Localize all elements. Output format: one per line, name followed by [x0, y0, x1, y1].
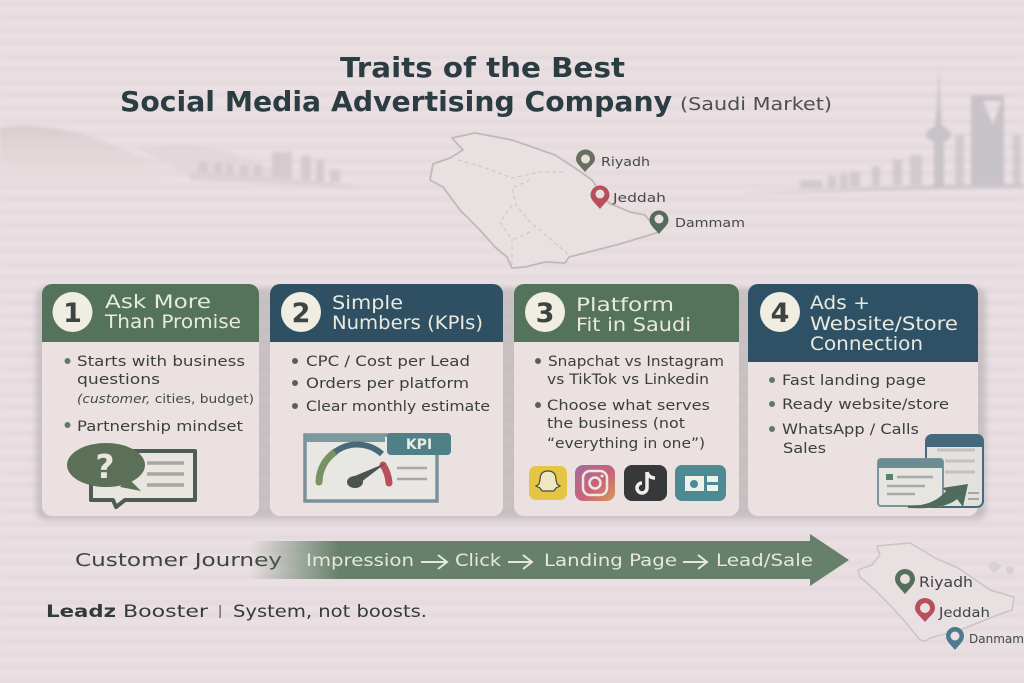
heading 1: [104, 291, 241, 333]
bullet list 3: Snapchat vs Instagram: [548, 354, 724, 370]
footer brand line: Leadz: [46, 602, 116, 622]
icon: KPI gauge dashboard: [305, 433, 451, 501]
bullet list 3: [535, 354, 724, 452]
pin: Danmam small: Danmam: [969, 632, 1024, 646]
customer journey arrow: Lead/Sale: [716, 551, 813, 571]
bullet list 1: questions: [77, 372, 160, 388]
right skyline backdrop: [745, 66, 1024, 194]
badge 1: [52, 292, 92, 332]
bullet list 3: “everything in one”): [547, 436, 705, 452]
heading 3: Platform: [576, 294, 674, 316]
heading 2: Simple: [332, 292, 403, 314]
icon: Snapchat: [529, 466, 567, 500]
heading 4: Website/Store: [810, 313, 958, 335]
subtitle: Saudi Market: (Saudi Market): [680, 94, 832, 115]
card shadows strip: [36, 288, 986, 520]
heading 3: Fit in Saudi: [576, 314, 691, 336]
badge 4: 4: [771, 298, 789, 329]
bullet list 3: the business (not: [547, 416, 685, 432]
customer journey arrow: Landing Page: [544, 551, 677, 571]
pin: Riyadh: Riyadh: [601, 154, 650, 169]
pin: Dammam: [650, 210, 745, 234]
panel 4: Ads + Website/Store Connection: [748, 284, 983, 516]
panel 2: Simple Numbers (KPIs): [270, 284, 503, 516]
icon: question speech bubble: [67, 443, 195, 507]
icon: TikTok: [624, 465, 667, 501]
bullet list 1: (customer, cities, budget): [77, 391, 254, 406]
heading 1: Ask More: [105, 291, 211, 313]
title: Traits of the Best: [340, 51, 625, 84]
icon: question speech bubble: ?: [95, 447, 115, 486]
pin: Jeddah: Jeddah: [612, 190, 666, 205]
bullet list 2: Clear monthly estimate: [306, 399, 490, 415]
pin: Jeddah small: Jeddah: [938, 605, 990, 621]
bullet list 4: [769, 373, 949, 457]
pin: Riyadh small: Riyadh: [919, 575, 973, 591]
pin: Jeddah: [590, 186, 666, 209]
pin: Danmam small: [946, 627, 1024, 650]
customer journey arrow: Impression: [306, 551, 414, 571]
map of Saudi Arabia with cities: [430, 133, 745, 268]
bullet list 4: Sales: [783, 441, 826, 457]
icon: Instagram: [575, 465, 615, 501]
badge 3: [525, 292, 565, 332]
bullet list 3: vs TikTok vs Linkedin: [547, 372, 709, 388]
badge 4: [760, 292, 800, 332]
heading 1: Than Promise: [104, 311, 241, 333]
panel 3: Platform Fit in Saudi: [514, 284, 739, 516]
bullet list 1: [64, 354, 254, 435]
heading 3: [576, 294, 691, 336]
small map with cities: [858, 543, 1024, 650]
customer journey heading: Customer Journey: [75, 550, 282, 571]
icon: camera / LinkedIn tile: [675, 465, 726, 501]
bullet list 2: [292, 354, 490, 415]
badge 2: 2: [292, 298, 310, 329]
footer brand line: Booster: [123, 602, 208, 622]
bullet list 4: Fast landing page: [782, 373, 926, 389]
faint decorative icons: [988, 561, 1014, 574]
heading 2: [332, 292, 483, 334]
heading 4: Connection: [810, 333, 923, 355]
bullet list 4: Ready website/store: [782, 397, 949, 413]
bullet list 3: Choose what serves: [547, 398, 710, 414]
map outline: [430, 133, 659, 268]
footer brand line: System, not boosts.: [233, 602, 427, 622]
title: Social Media Advertising Company: [120, 85, 672, 118]
bullet list 2: Orders per platform: [306, 376, 469, 392]
heading 2: Numbers (KPIs): [332, 312, 483, 334]
customer journey arrow: [250, 534, 849, 586]
pin: Jeddah small: [915, 598, 990, 622]
badge 3: 3: [536, 298, 554, 329]
footer brand line: [46, 602, 427, 622]
customer journey arrow: Click: [455, 551, 501, 571]
bullet list 2: CPC / Cost per Lead: [306, 354, 470, 370]
icon: KPI gauge dashboard: KPI: [406, 437, 432, 453]
title: [120, 51, 672, 118]
panel 1: Ask More Than Promise: [42, 284, 259, 516]
pin: Dammam: Dammam: [675, 215, 745, 230]
bullet list 1: Starts with business: [77, 354, 245, 370]
badge 1: 1: [63, 298, 82, 329]
pin: Riyadh small: [895, 569, 973, 594]
badge 2: [281, 292, 321, 332]
heading 4: Ads +: [810, 292, 870, 314]
icon: phone and browser with growth arrow: [878, 435, 983, 508]
small map outline: [858, 543, 1014, 641]
bullet list 1: Partnership mindset: [77, 419, 243, 435]
heading 4: [810, 292, 958, 355]
bullet list 4: WhatsApp / Calls: [782, 422, 919, 438]
left desert skyline backdrop: [0, 126, 365, 195]
pin: Riyadh: [576, 150, 650, 172]
